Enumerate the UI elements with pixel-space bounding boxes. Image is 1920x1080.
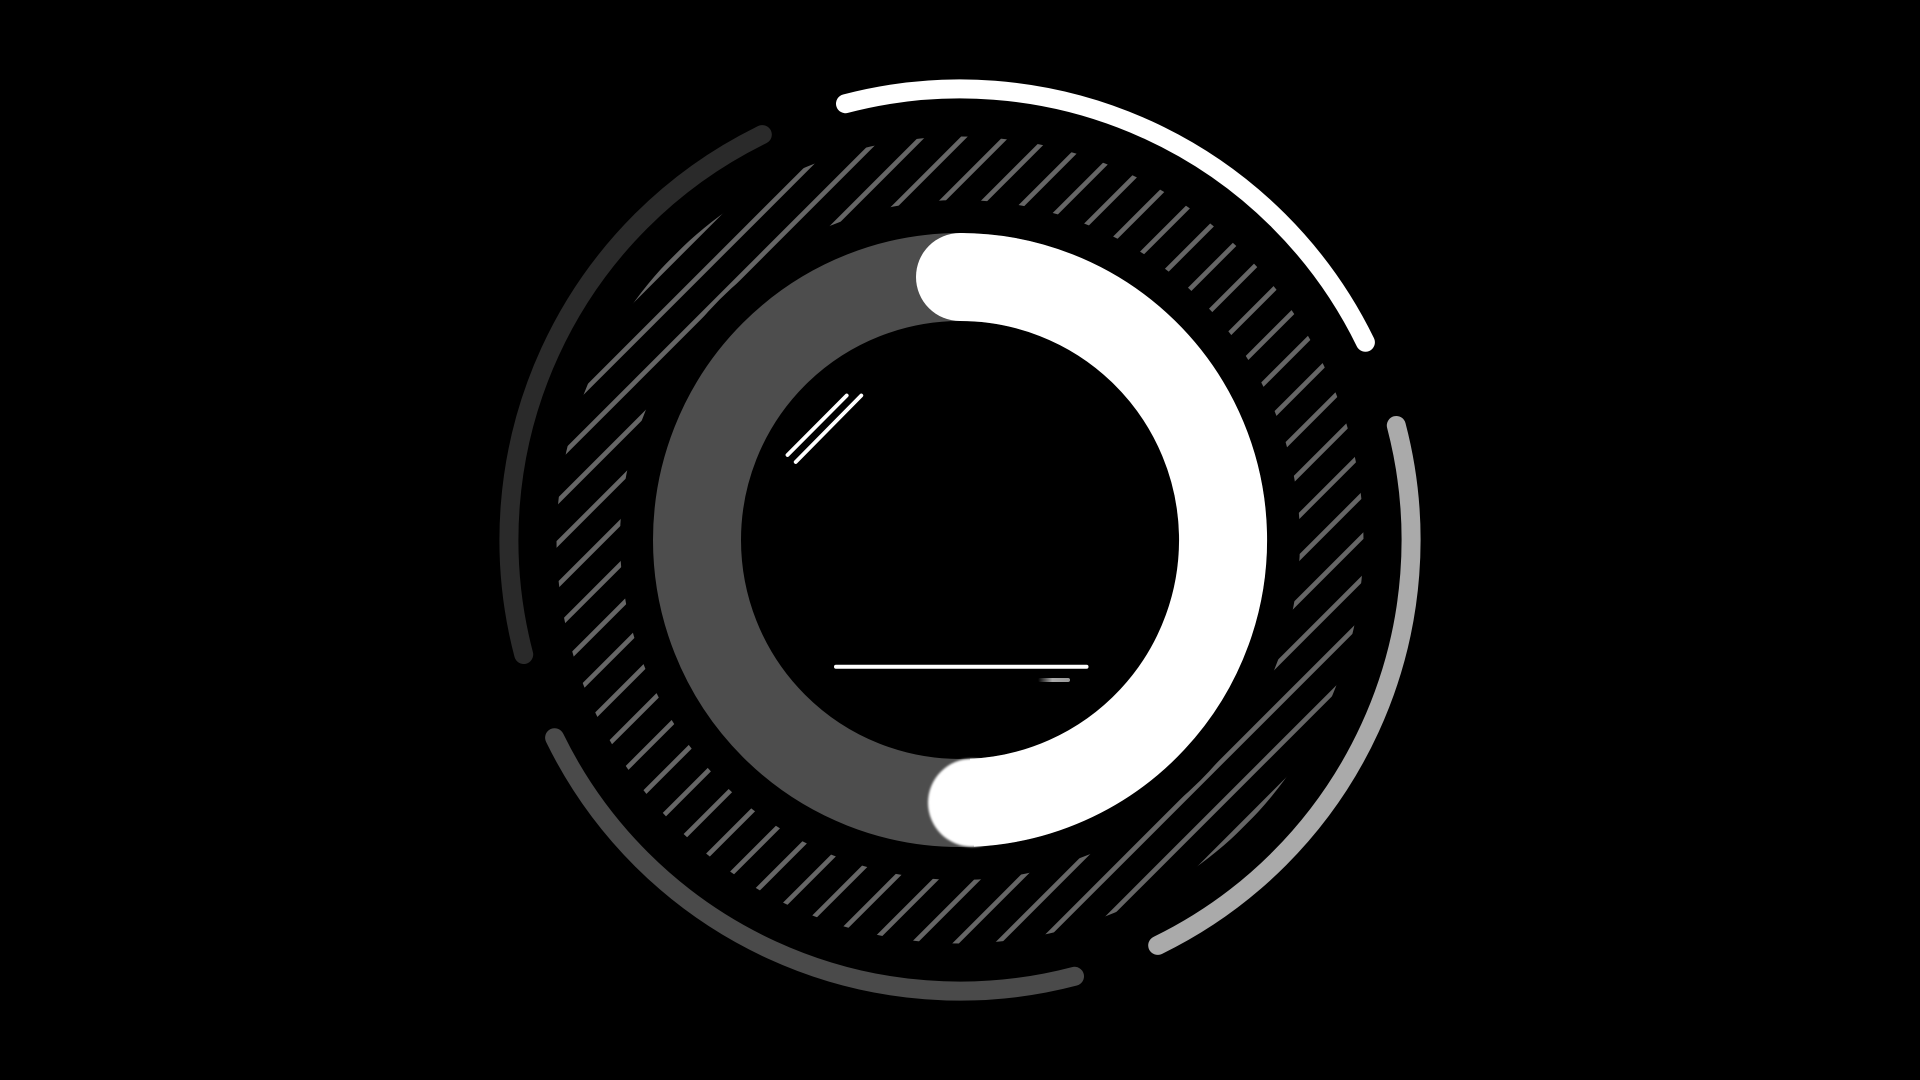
inner baseline: long horizontal line — [836, 665, 1086, 669]
outer arc: white, top right — [846, 89, 1365, 342]
outer arc: light gray, lower right — [1158, 426, 1411, 945]
inner glint: two diagonal lines — [788, 396, 861, 462]
outer arc: mid gray, lower left — [555, 738, 1074, 991]
main ring track — [697, 277, 1223, 803]
circular gauge graphic — [500, 79, 1421, 1001]
outer arc: dark gray, upper left — [509, 135, 762, 655]
inner baseline: short faded dash — [1038, 678, 1070, 682]
main ring progress arc — [916, 233, 1223, 847]
diagonal hatch ring — [550, 130, 1370, 950]
